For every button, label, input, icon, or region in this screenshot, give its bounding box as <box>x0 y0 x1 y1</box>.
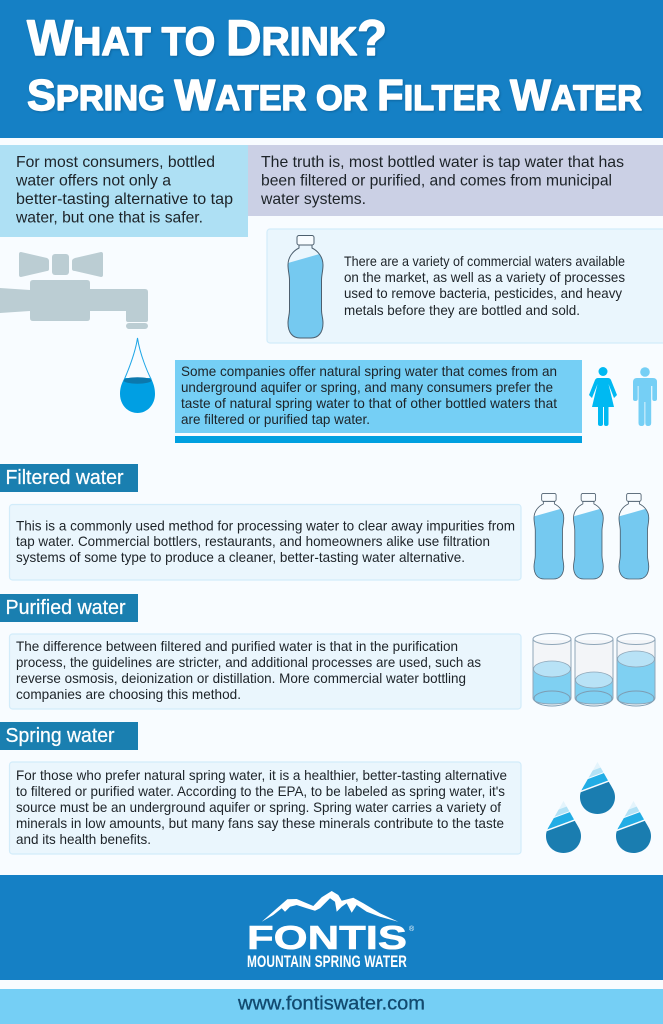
heading: spring water: Spring water <box>6 725 115 747</box>
website bar: www.fontiswater.com <box>237 994 425 1014</box>
panel: the truth: water systems. <box>260 191 366 208</box>
footer band <box>0 875 663 980</box>
commercial waters text: metals before they are bottled and sold. <box>344 302 580 318</box>
heading: purified water: Purified water <box>6 597 126 619</box>
panel: purified water text: process, the guidelines are stricter, and additional processes are used, such as <box>16 654 481 670</box>
logo: mountain <box>262 891 398 922</box>
panel: purified water text: companies are choosing this method. <box>16 686 241 702</box>
logo: wordmark: MOUNTAIN SPRING WATER <box>247 953 407 972</box>
panel: natural spring water <box>175 360 582 443</box>
logo: wordmark: FONTIS <box>247 919 407 956</box>
panel: filtered water text: This is a commonly used method for processing water to clear away impurities from <box>16 518 515 534</box>
logo: wordmark <box>247 919 415 972</box>
panel: natural spring water: taste of natural spring water to that of other bottled waters that <box>181 395 557 411</box>
panel: the truth <box>248 145 663 216</box>
icon: man <box>633 367 657 426</box>
icon: three drops <box>546 762 651 853</box>
website bar <box>0 989 663 1024</box>
header band <box>0 0 663 138</box>
panel: filtered water text: systems of some type to produce a cleaner, better-tasting water alternative. <box>16 549 465 565</box>
panel: spring water text: minerals in low amounts, but many fans say these minerals contribute to the taste <box>16 815 504 831</box>
commercial waters text <box>344 253 625 318</box>
title: WHAT TO DRINK? <box>27 10 387 66</box>
panel: purified water text: The difference between filtered and purified water is that in the purification <box>16 638 458 654</box>
panel: spring water text: source must be an underground aquifer or spring. Spring water carries a variety of <box>16 799 501 815</box>
title: SPRING WATER OR FILTER WATER <box>27 71 642 120</box>
logo: wordmark: ® <box>409 925 415 933</box>
panel: filtered water text: tap water. Commercial bottlers, restaurants, and homeowners alike use filtration <box>16 533 490 549</box>
panel: bottled water intro <box>0 145 248 237</box>
panel: bottled water intro: water, but one that is safer. <box>15 210 203 226</box>
commercial waters text: used to remove bacteria, pesticides, and heavy <box>344 285 622 301</box>
panel: spring water text <box>10 762 521 854</box>
panel: bottled water intro: water offers not only a <box>15 172 171 190</box>
heading: spring water <box>0 722 138 750</box>
panel: purified water text: reverse osmosis, deionization or distillation. More commercial water bottling <box>16 670 466 686</box>
panel: spring water text: to filtered or purified water. According to the EPA, to be labeled as spring water, it's <box>16 783 505 799</box>
icon: woman <box>589 367 617 426</box>
panel: spring water text: For those who prefer natural spring water, it is a healthier, better-tasting alternative <box>16 767 507 783</box>
panel: the truth: been filtered or purified, and comes from municipal <box>261 172 612 190</box>
commercial waters text: on the market, as well as a variety of processes <box>344 269 625 285</box>
heading: filtered water: Filtered water <box>6 467 124 489</box>
panel: natural spring water: are filtered or purified tap water. <box>181 411 370 427</box>
commercial waters text: There are a variety of commercial waters available <box>344 253 625 269</box>
panel: the truth: The truth is, most bottled water is tap water that has <box>261 154 624 171</box>
panel: purified water text <box>10 634 521 709</box>
panel: bottled water intro: For most consumers, bottled <box>16 154 215 171</box>
title <box>27 10 642 120</box>
icon: tap <box>0 252 148 329</box>
panel: commercial waters <box>267 229 663 343</box>
heading: filtered water <box>0 464 138 492</box>
icon: water drop <box>120 338 155 413</box>
panel: spring water text: and its health benefits. <box>16 831 151 847</box>
icon: bottle <box>288 236 323 338</box>
panel: natural spring water: underground aquifer or spring, and many consumers prefer the <box>181 379 553 395</box>
panel: natural spring water: Some companies offer natural spring water that comes from an <box>181 363 557 379</box>
icon: three glasses <box>533 634 655 706</box>
icon: three bottles <box>534 493 649 579</box>
heading: purified water <box>0 594 138 622</box>
panel: bottled water intro: better-tasting alternative to tap <box>16 191 233 208</box>
panel: filtered water text <box>10 504 521 580</box>
